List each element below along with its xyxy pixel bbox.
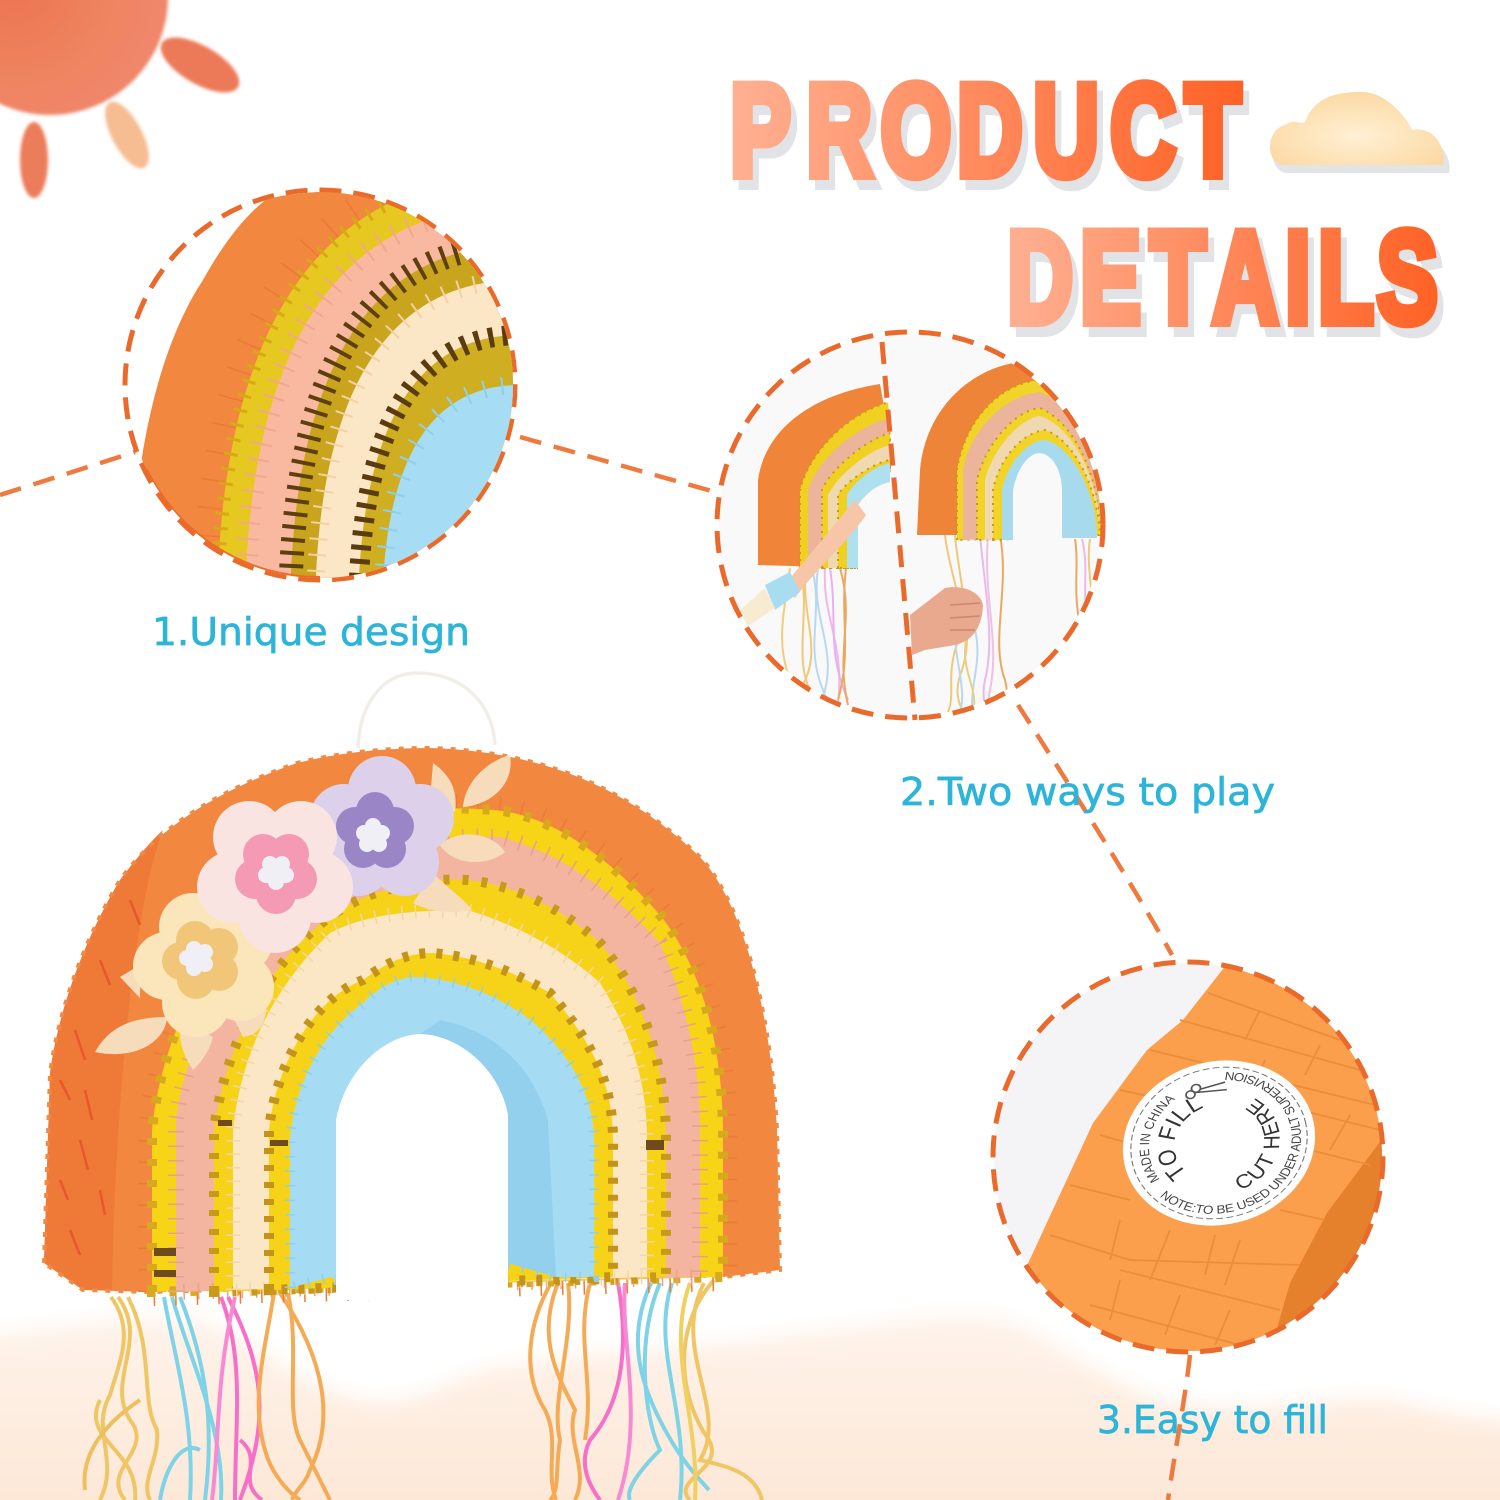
sticker: TO FILL <box>1158 1099 1204 1182</box>
sticker <box>1122 1060 1316 1226</box>
background wash <box>0 1317 1500 1500</box>
ribbons <box>84 1280 762 1500</box>
hanging loop <box>358 673 495 748</box>
icon: cloud <box>1270 92 1450 173</box>
main product: rainbow pinata <box>44 673 780 1500</box>
title <box>730 57 1444 360</box>
rainbow body <box>44 748 780 1300</box>
panel: two ways to play circle <box>717 332 1110 730</box>
left: pull-strip rainbow <box>738 384 895 720</box>
label: two ways to play: 2.Two ways to play <box>900 770 1275 814</box>
hand <box>910 587 983 655</box>
icon: scissors <box>1184 1077 1227 1100</box>
title: PRODUCT <box>730 57 1241 203</box>
dashed connectors <box>0 437 1190 1500</box>
right: hand-pull rainbow <box>910 362 1110 730</box>
panel: unique design detail circle <box>122 188 518 582</box>
sticker: NOTE:TO BE USED UNDER ADULT SUPERVISION <box>1160 1072 1301 1214</box>
flower: pink <box>197 801 353 953</box>
title: DETAILS <box>1013 214 1444 360</box>
leaves <box>95 755 511 1070</box>
label: easy to fill: 3.Easy to fill <box>1097 1398 1328 1442</box>
dark foil patches <box>154 1120 664 1277</box>
pull strip <box>792 500 866 598</box>
sticker: MADE IN CHINA <box>1140 1096 1176 1184</box>
flower: cream <box>133 893 274 1037</box>
icon: sun <box>0 0 248 198</box>
title: DETAILS <box>1007 204 1438 350</box>
title: PRODUCT <box>736 67 1247 213</box>
sticker: CUT HERE <box>1236 1098 1280 1188</box>
label: unique design: 1.Unique design <box>152 610 470 654</box>
flower: purple <box>310 756 454 896</box>
panel: easy to fill circle <box>990 960 1386 1354</box>
